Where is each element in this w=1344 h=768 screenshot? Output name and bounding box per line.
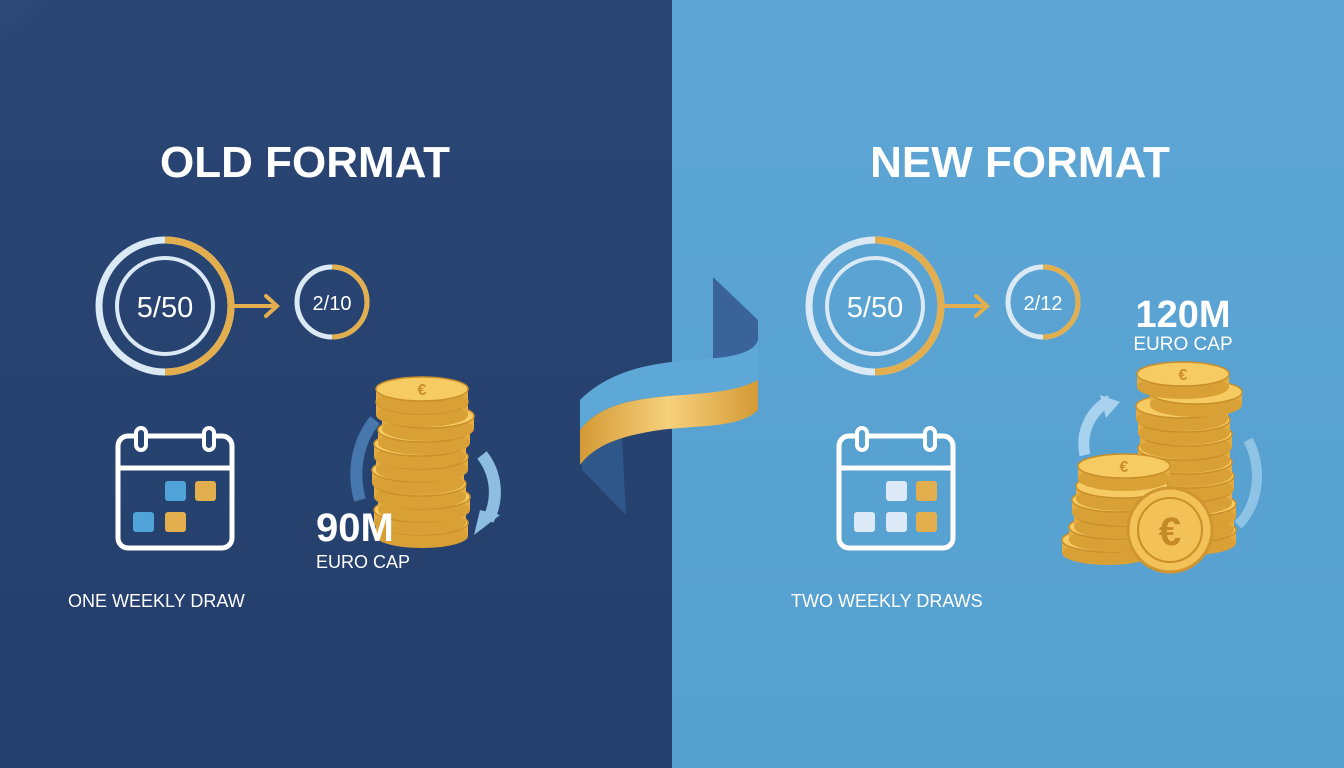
label: 120M euro cap: [1133, 294, 1233, 355]
label: 120M euro cap: 120M: [1135, 294, 1231, 336]
ring chart: new 5/50 to 2/12: 2/12: [1024, 293, 1062, 315]
ring chart: old 5/50 to 2/10: 5/50: [137, 292, 193, 324]
panel: new format background: [672, 0, 1344, 768]
icon: coin stack old with cycle arrows: €: [418, 382, 427, 399]
ring chart: new 5/50 to 2/12: [809, 240, 1078, 372]
label: two weekly draws: TWO WEEKLY DRAWS: [791, 591, 983, 611]
label: 90M euro cap: [316, 506, 410, 572]
icon: coin stacks new with arrows: €: [1159, 510, 1181, 554]
icon: calendar old: [118, 428, 232, 548]
title: old format: OLD FORMAT: [160, 138, 450, 187]
icon: transition ribbon: [580, 277, 758, 515]
label: 90M euro cap: EURO CAP: [316, 552, 410, 572]
ring chart: new 5/50 to 2/12: 5/50: [847, 292, 903, 324]
icon: coin stacks new with arrows: €: [1179, 367, 1188, 384]
icon: coin stacks new with arrows: €: [1120, 459, 1129, 476]
icon: coin stacks new with arrows: [1062, 362, 1257, 572]
label: 90M euro cap: 90M: [316, 506, 394, 550]
icon: calendar new: [839, 428, 953, 548]
ring chart: old 5/50 to 2/10: 2/10: [313, 293, 351, 315]
label: one weekly draw: ONE WEEKLY DRAW: [68, 591, 245, 611]
title: new format: NEW FORMAT: [870, 138, 1170, 187]
ring chart: old 5/50 to 2/10: [99, 240, 367, 372]
panel: old format background: [0, 0, 672, 768]
label: 120M euro cap: EURO CAP: [1133, 334, 1233, 355]
icon: coin stack old with cycle arrows: [356, 377, 500, 548]
